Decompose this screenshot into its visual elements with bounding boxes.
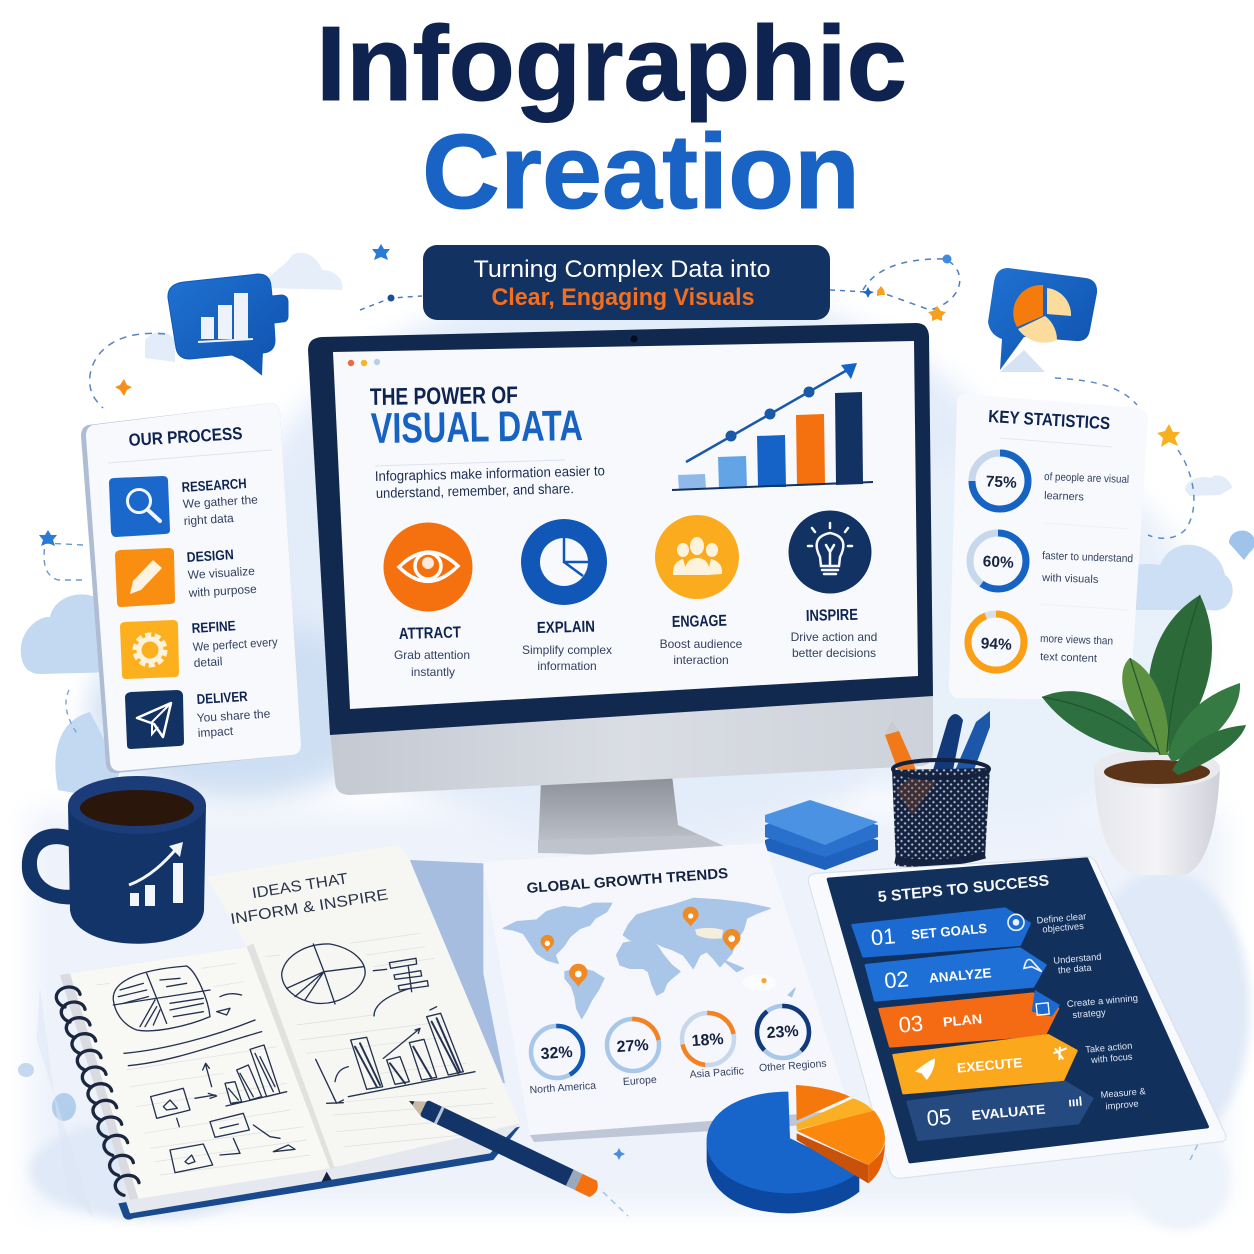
notebook heading: INFORM & INSPIRE bbox=[229, 886, 389, 928]
panel: key statistics bbox=[949, 394, 1148, 700]
region labels: Asia Pacific bbox=[689, 1065, 744, 1081]
screen heading: THE POWER OF bbox=[370, 382, 518, 411]
monitor stand bbox=[538, 775, 728, 856]
notebook with sketches bbox=[37, 845, 520, 1220]
tagline badge bbox=[423, 245, 830, 320]
panel: 5 steps to success tablet bbox=[808, 857, 1226, 1178]
step 05: ıııl bbox=[1068, 1094, 1083, 1110]
notebook heading bbox=[229, 870, 389, 928]
dashed connectors and stars bbox=[39, 244, 1205, 1216]
step descriptions: strategy bbox=[1072, 1007, 1106, 1020]
value descriptions: Drive action and bbox=[791, 630, 877, 644]
pen bbox=[405, 1093, 601, 1199]
value labels bbox=[399, 607, 858, 643]
step descriptions: right data bbox=[183, 511, 234, 528]
region labels: Europe bbox=[622, 1074, 657, 1088]
ring 18% bbox=[682, 1013, 734, 1065]
stat ring 94%: 94% bbox=[980, 635, 1012, 654]
coffee mug bbox=[22, 776, 206, 944]
region labels: North America bbox=[529, 1080, 597, 1096]
step descriptions: with purpose bbox=[187, 582, 257, 600]
ruled lines bbox=[97, 933, 497, 1175]
left page bbox=[60, 947, 330, 1200]
value descriptions: Grab attention bbox=[394, 648, 470, 662]
sketches: left page bbox=[113, 966, 295, 1173]
ring 32%: 32% bbox=[540, 1044, 573, 1063]
step descriptions: detail bbox=[193, 654, 223, 670]
chat bubble: bar chart icon bbox=[168, 274, 288, 375]
value descriptions: instantly bbox=[411, 665, 455, 679]
region labels: Other Regions bbox=[759, 1058, 827, 1074]
step descriptions bbox=[1036, 911, 1147, 1111]
step descriptions: We gather the bbox=[182, 492, 259, 511]
step descriptions: the data bbox=[1058, 962, 1093, 975]
screen intro text bbox=[375, 462, 605, 501]
step 05: EVALUATE bbox=[971, 1102, 1046, 1123]
notebook heading: IDEAS THAT bbox=[251, 870, 350, 902]
step 01: SET GOALS bbox=[911, 921, 988, 942]
step 03: PLAN bbox=[942, 1011, 983, 1030]
stat descriptions: with visuals bbox=[1041, 572, 1099, 586]
step 02 bbox=[866, 948, 1046, 1001]
value descriptions: better decisions bbox=[792, 646, 876, 660]
design icon bbox=[115, 548, 175, 607]
refine icon bbox=[120, 620, 179, 679]
screen intro text: understand, remember, and share. bbox=[376, 480, 574, 501]
step descriptions: Take action bbox=[1085, 1041, 1133, 1055]
region labels bbox=[529, 1058, 827, 1096]
step descriptions: You share the bbox=[196, 707, 271, 725]
ring 18%: 18% bbox=[691, 1031, 724, 1050]
spiral binding bbox=[56, 987, 139, 1195]
pencil cup bbox=[885, 711, 990, 867]
document: global growth trends bbox=[482, 843, 855, 1142]
step descriptions: Measure & bbox=[1100, 1086, 1147, 1100]
monitor screen bbox=[333, 341, 918, 709]
step 01: 01 bbox=[870, 923, 896, 950]
attract: eye icon bbox=[384, 522, 472, 612]
step descriptions: We perfect every bbox=[192, 635, 278, 654]
ring 27%: 27% bbox=[616, 1037, 649, 1056]
step names: DELIVER bbox=[196, 688, 248, 707]
sketches: right page bbox=[282, 944, 475, 1103]
value labels: ATTRACT bbox=[399, 624, 461, 643]
value labels: ENGAGE bbox=[672, 613, 727, 631]
step names: DESIGN bbox=[186, 546, 234, 565]
step names bbox=[181, 475, 248, 707]
title bbox=[316, 5, 907, 231]
step 05 bbox=[907, 1082, 1093, 1140]
panel: 5 steps to success tablet: 5 STEPS TO SUCCESS bbox=[877, 872, 1050, 906]
screen intro text: Infographics make information easier to bbox=[375, 462, 605, 484]
step descriptions: We visualize bbox=[187, 564, 256, 582]
stat descriptions bbox=[1040, 471, 1133, 665]
leaves bbox=[1042, 595, 1246, 775]
step 02: 02 bbox=[883, 966, 910, 993]
stacked coasters bbox=[765, 800, 878, 870]
title: Creation bbox=[422, 113, 860, 231]
tagline badge: Turning Complex Data into bbox=[474, 256, 770, 283]
monitor body and chin bbox=[330, 695, 933, 795]
pot bbox=[1094, 748, 1220, 875]
step 02: ANALYZE bbox=[928, 965, 992, 986]
step 04 bbox=[893, 1035, 1077, 1093]
stat ring 60%: 60% bbox=[982, 553, 1014, 572]
screen heading: VISUAL DATA bbox=[370, 402, 583, 453]
step descriptions: with focus bbox=[1090, 1052, 1133, 1065]
tagline badge: Clear, Engaging Visuals bbox=[492, 284, 754, 311]
panel: key statistics: KEY STATISTICS bbox=[988, 406, 1111, 433]
step descriptions: Create a winning bbox=[1066, 993, 1138, 1009]
stat descriptions: of people are visual bbox=[1044, 471, 1129, 486]
research icon bbox=[109, 476, 170, 537]
value descriptions bbox=[394, 630, 877, 679]
3D pie chart bbox=[707, 1085, 885, 1213]
stat ring 75%: 75% bbox=[985, 473, 1017, 492]
panel: our process bbox=[81, 403, 301, 773]
monitor bbox=[308, 323, 933, 856]
ring 23% bbox=[757, 1006, 809, 1058]
title: Infographic bbox=[316, 5, 907, 123]
screen heading bbox=[370, 382, 583, 453]
step descriptions: improve bbox=[1105, 1099, 1139, 1111]
world map bbox=[503, 898, 795, 1018]
stat ring 75% bbox=[972, 453, 1028, 509]
step descriptions: Understand bbox=[1053, 952, 1102, 966]
step names: REFINE bbox=[191, 617, 236, 636]
stat ring 60% bbox=[970, 533, 1026, 589]
deliver icon bbox=[125, 690, 184, 749]
stat descriptions: learners bbox=[1044, 490, 1085, 503]
screen bar chart with trend arrow bbox=[672, 363, 873, 490]
value descriptions: Simplify complex bbox=[522, 643, 612, 657]
step descriptions: objectives bbox=[1042, 921, 1084, 934]
right page bbox=[207, 845, 520, 1168]
stat descriptions: text content bbox=[1040, 651, 1097, 665]
ring 32% bbox=[531, 1026, 583, 1078]
ring 23%: 23% bbox=[766, 1023, 799, 1042]
document: global growth trends: GLOBAL GROWTH TRENDS bbox=[526, 866, 729, 897]
value descriptions: interaction bbox=[673, 653, 729, 667]
stat ring 94% bbox=[968, 614, 1024, 670]
step 05: 05 bbox=[926, 1104, 952, 1131]
ring 27% bbox=[607, 1019, 659, 1071]
step descriptions: Define clear bbox=[1036, 911, 1087, 925]
background wash and clouds bbox=[18, 253, 1254, 1230]
stat descriptions: more views than bbox=[1040, 633, 1113, 648]
plant in white pot bbox=[1042, 595, 1246, 875]
stat descriptions: faster to understand bbox=[1042, 550, 1133, 565]
value labels: INSPIRE bbox=[806, 607, 858, 625]
step 03: 03 bbox=[898, 1011, 924, 1038]
value descriptions: Boost audience bbox=[660, 637, 743, 651]
step 03 bbox=[879, 990, 1060, 1047]
panel: our process: OUR PROCESS bbox=[128, 423, 243, 450]
explain: pie icon bbox=[521, 519, 607, 605]
chat bubble: pie chart icon bbox=[988, 268, 1097, 370]
engage: people icon bbox=[655, 515, 739, 599]
value labels: EXPLAIN bbox=[537, 619, 595, 637]
inspire: light bulb icon bbox=[788, 510, 872, 594]
screen window dots bbox=[348, 359, 380, 366]
step 01 bbox=[852, 908, 1030, 957]
step descriptions bbox=[182, 492, 278, 740]
value descriptions: information bbox=[537, 659, 597, 673]
step names: RESEARCH bbox=[181, 475, 247, 495]
step 04: EXECUTE bbox=[956, 1055, 1023, 1076]
step descriptions: impact bbox=[197, 724, 234, 740]
